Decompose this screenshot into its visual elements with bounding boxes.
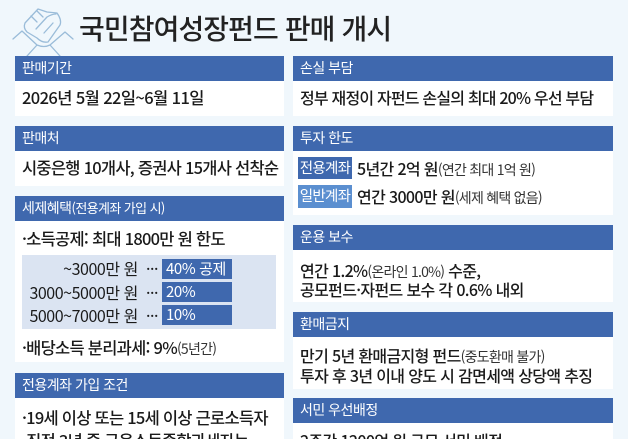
text: general account limit: 연간 3000만 원(세제 혜택 없음) xyxy=(357,184,542,208)
heading: redemption ban: 환매금지 xyxy=(300,314,350,334)
text: redemption ban line 1: 만기 5년 환매금지형 펀드(중도환매 불가) xyxy=(300,343,545,367)
heading: tax benefits xyxy=(15,196,284,221)
bracket row 2: 3000~5000만 원 ··· xyxy=(29,280,158,304)
heading: investment limit: 투자 한도 xyxy=(300,128,353,148)
heading: management fee: 운용 보수 xyxy=(300,227,353,247)
text: income deduction: ·소득공제: 최대 1800만 원 한도 xyxy=(22,226,225,250)
text: management fee line 1: 연간 1.2%(온라인 1.0%) 수준, xyxy=(300,258,480,282)
bar: 20% deduction: 20% xyxy=(166,281,195,302)
heading: management fee xyxy=(293,225,613,250)
heading: investment limit xyxy=(293,126,613,151)
bar: 40% deduction: 40% 공제 xyxy=(166,258,226,279)
heading: account conditions xyxy=(15,373,284,398)
heading: sale period xyxy=(15,56,284,81)
heading: sales channels: 판매처 xyxy=(22,128,59,148)
panel: low-income priority allocation xyxy=(293,398,613,439)
panel: investment limit xyxy=(293,126,613,215)
panel: redemption ban xyxy=(293,312,613,389)
table: deduction brackets xyxy=(22,255,276,329)
icon: clasped hands xyxy=(12,8,74,56)
heading: tax benefits: 세제혜택(전용계좌 가입 시) xyxy=(22,198,165,218)
tag: dedicated account: 전용계좌 xyxy=(300,157,350,178)
heading: low-income priority xyxy=(293,398,613,423)
heading: sales channels xyxy=(15,126,284,151)
text: sales channels detail: 시중은행 10개사, 증권사 15개사 선착순 xyxy=(22,155,278,179)
heading: loss absorption: 손실 부담 xyxy=(300,58,353,78)
bar: 10% deduction: 10% xyxy=(166,304,195,325)
bracket row 1: ~3000만 원 ··· xyxy=(63,256,158,280)
tag: general account: 일반계좌 xyxy=(300,185,350,206)
text: redemption ban line 2: 투자 후 3년 이내 양도 시 감면세액 상당액 추징 xyxy=(300,363,592,387)
heading: account conditions: 전용계좌 가입 조건 xyxy=(22,375,128,395)
panel: management fee xyxy=(293,225,613,302)
text: eligibility line 1: ·19세 이상 또는 15세 이상 근로소득자 xyxy=(22,405,268,429)
panel: sale period xyxy=(15,56,284,116)
text: dedicated account limit: 5년간 2억 원(연간 최대 1억 원) xyxy=(357,156,535,180)
bracket row 3: 5000~7000만 원 ··· xyxy=(29,303,158,327)
panel: tax benefits xyxy=(15,196,284,362)
panel: dedicated account conditions xyxy=(15,373,284,439)
bar: 20% deduction xyxy=(162,282,232,302)
bar: 10% deduction xyxy=(162,305,232,325)
heading: loss absorption xyxy=(293,56,613,81)
heading: low-income priority: 서민 우선배정 xyxy=(300,400,378,420)
text: management fee line 2: 공모펀드·자펀드 보수 각 0.6% 내외 xyxy=(300,277,524,301)
text: dividend tax: ·배당소득 분리과세: 9%(5년간) xyxy=(22,335,216,359)
heading: sale period: 판매기간 xyxy=(22,58,72,78)
heading: redemption ban xyxy=(293,312,613,337)
title: 국민참여성장펀드 판매 개시 xyxy=(79,8,391,48)
text: sale period dates: 2026년 5월 22일~6월 11일 xyxy=(22,85,204,109)
panel: sales channels xyxy=(15,126,284,186)
text: loss absorption detail: 정부 재정이 자펀드 손실의 최대 20% 우선 부담 xyxy=(300,85,593,109)
panel: loss absorption xyxy=(293,56,613,116)
